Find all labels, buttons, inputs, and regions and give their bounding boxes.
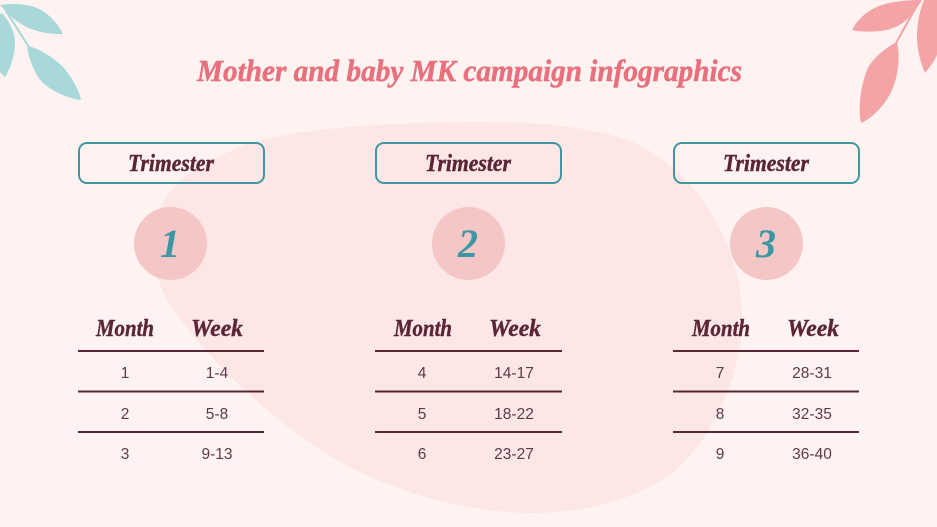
trimester 2 table: 14-17 — [494, 365, 534, 382]
trimester 3 number badge — [730, 207, 803, 280]
trimester 1 table: 9-13 — [201, 446, 233, 463]
trimester 3 table — [673, 316, 859, 463]
trimester 1 table: 1 — [121, 365, 129, 382]
trimester 1 table: 3 — [121, 446, 129, 463]
panel: trimester 2 — [375, 143, 562, 463]
trimester 3 number badge: 3 — [755, 221, 776, 266]
trimester 3 table: 36-40 — [792, 446, 832, 463]
trimester 1 table: Month — [95, 316, 154, 342]
trimester 3 table: Month — [691, 316, 750, 342]
trimester 2 table — [375, 316, 562, 463]
background blob — [153, 122, 742, 513]
trimester 3 table: 32-35 — [792, 406, 832, 423]
trimester 1 label — [79, 143, 264, 183]
trimester 2 label: Trimester — [425, 151, 512, 177]
trimester 3 table: 7 — [716, 365, 724, 382]
trimester 2 table: Week — [489, 316, 541, 342]
trimester 2 table: 18-22 — [494, 406, 534, 423]
trimester 2 table: 4 — [418, 365, 427, 382]
trimester 2 label — [376, 143, 561, 183]
trimester 2 number badge — [432, 207, 505, 280]
trimester 1 label: Trimester — [128, 151, 215, 177]
trimester 3 label: Trimester — [723, 151, 810, 177]
trimester 3 table: Week — [787, 316, 839, 342]
trimester 1 table — [78, 316, 264, 463]
title: Mother and baby MK campaign infographics — [196, 53, 742, 88]
trimester 2 table: Month — [393, 316, 452, 342]
trimester 2 table: 23-27 — [494, 446, 534, 463]
trimester 1 table: 2 — [121, 406, 129, 423]
trimester 1 number badge: 1 — [160, 221, 180, 266]
panel: trimester 1 — [78, 143, 264, 463]
trimester 3 table: 8 — [716, 406, 724, 423]
trimester 3 table: 28-31 — [792, 365, 832, 382]
trimester 1 table: 1-4 — [206, 365, 229, 382]
trimester 1 table: 5-8 — [206, 406, 228, 423]
trimester 1 table: Week — [191, 316, 243, 342]
trimester 3 label — [674, 143, 859, 183]
trimester 2 table: 5 — [418, 406, 426, 423]
trimester 2 table: 6 — [418, 446, 426, 463]
panel: trimester 3 — [673, 143, 859, 463]
trimester 3 table: 9 — [716, 446, 724, 463]
icon: teal leaves top left — [0, 4, 81, 100]
icon: pink leaves top right — [852, 0, 937, 123]
trimester 1 number badge — [134, 207, 207, 280]
trimester 2 number badge: 2 — [457, 221, 478, 266]
